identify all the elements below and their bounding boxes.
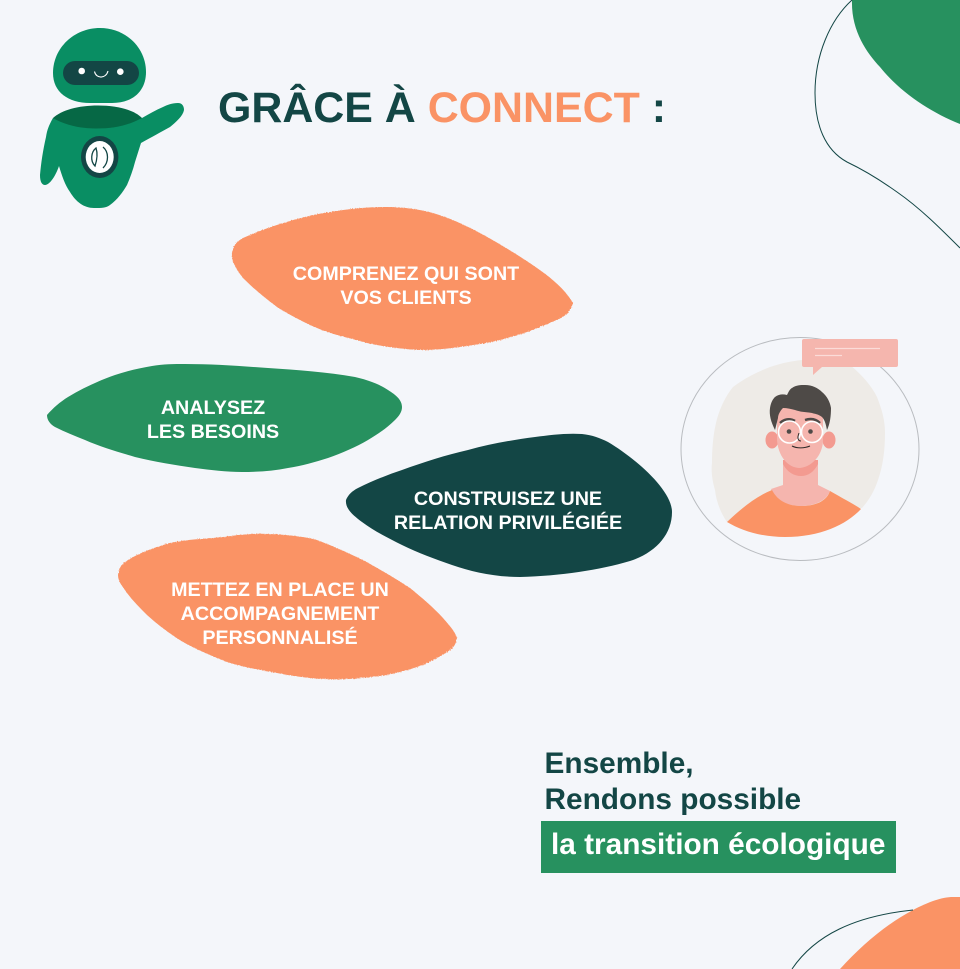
text: comprenez: VOS CLIENTS: [340, 287, 472, 309]
text: comprenez: COMPRENEZ QUI SONT: [293, 263, 519, 285]
robot badge: [81, 136, 118, 178]
highlighted banner: la transition écologique: [551, 828, 885, 861]
orange shirt: [727, 490, 861, 537]
top right green blob: [852, 0, 960, 124]
bottom right curved line: [792, 910, 913, 969]
robot visor: [63, 61, 139, 85]
text: mettez en place: [171, 579, 389, 649]
petal: comprenez: [232, 207, 573, 350]
bottom right orange blob: [840, 897, 960, 969]
text: analysez: ANALYSEZ: [161, 397, 265, 419]
top right curved line: [815, 0, 960, 248]
robot eyes and smile: [78, 68, 124, 77]
text: mettez en place: ACCOMPAGNEMENT: [181, 603, 379, 625]
robot collar: [53, 106, 142, 128]
highlighted banner: [541, 821, 896, 873]
robot body and arm: [40, 103, 184, 208]
text: mettez en place: METTEZ EN PLACE UN: [171, 579, 389, 601]
text: analysez: [147, 397, 279, 443]
hair: [770, 385, 831, 430]
outer circle: [681, 338, 919, 560]
chin shadow: [783, 460, 818, 476]
title: GRÂCE À CONNECT :: [218, 84, 666, 132]
face: [777, 405, 823, 468]
petal: mettez en place: [118, 534, 457, 679]
closing text: Rendons possible: [544, 783, 801, 816]
text: analysez: LES BESOINS: [147, 421, 279, 443]
glasses: [778, 421, 822, 443]
ears: [766, 432, 778, 448]
eyes: [787, 429, 791, 434]
nose and mouth: [792, 433, 810, 448]
neck: [771, 460, 830, 506]
text: construisez: CONSTRUISEZ UNE: [414, 488, 602, 510]
text: comprenez: [293, 263, 519, 309]
closing text: [544, 747, 801, 816]
petal: construisez: [346, 434, 672, 577]
petal: analysez: [47, 364, 402, 472]
text: construisez: RELATION PRIVILÉGIÉE: [394, 512, 622, 534]
eyebrows: [780, 419, 820, 423]
closing text: Ensemble,: [544, 747, 694, 780]
text: mettez en place: PERSONNALISÉ: [202, 627, 358, 649]
beige blob: [712, 359, 885, 522]
text: construisez: [394, 488, 622, 534]
speech bubble lines: [815, 348, 880, 356]
robot head: [53, 28, 146, 103]
speech bubble: [802, 339, 898, 375]
